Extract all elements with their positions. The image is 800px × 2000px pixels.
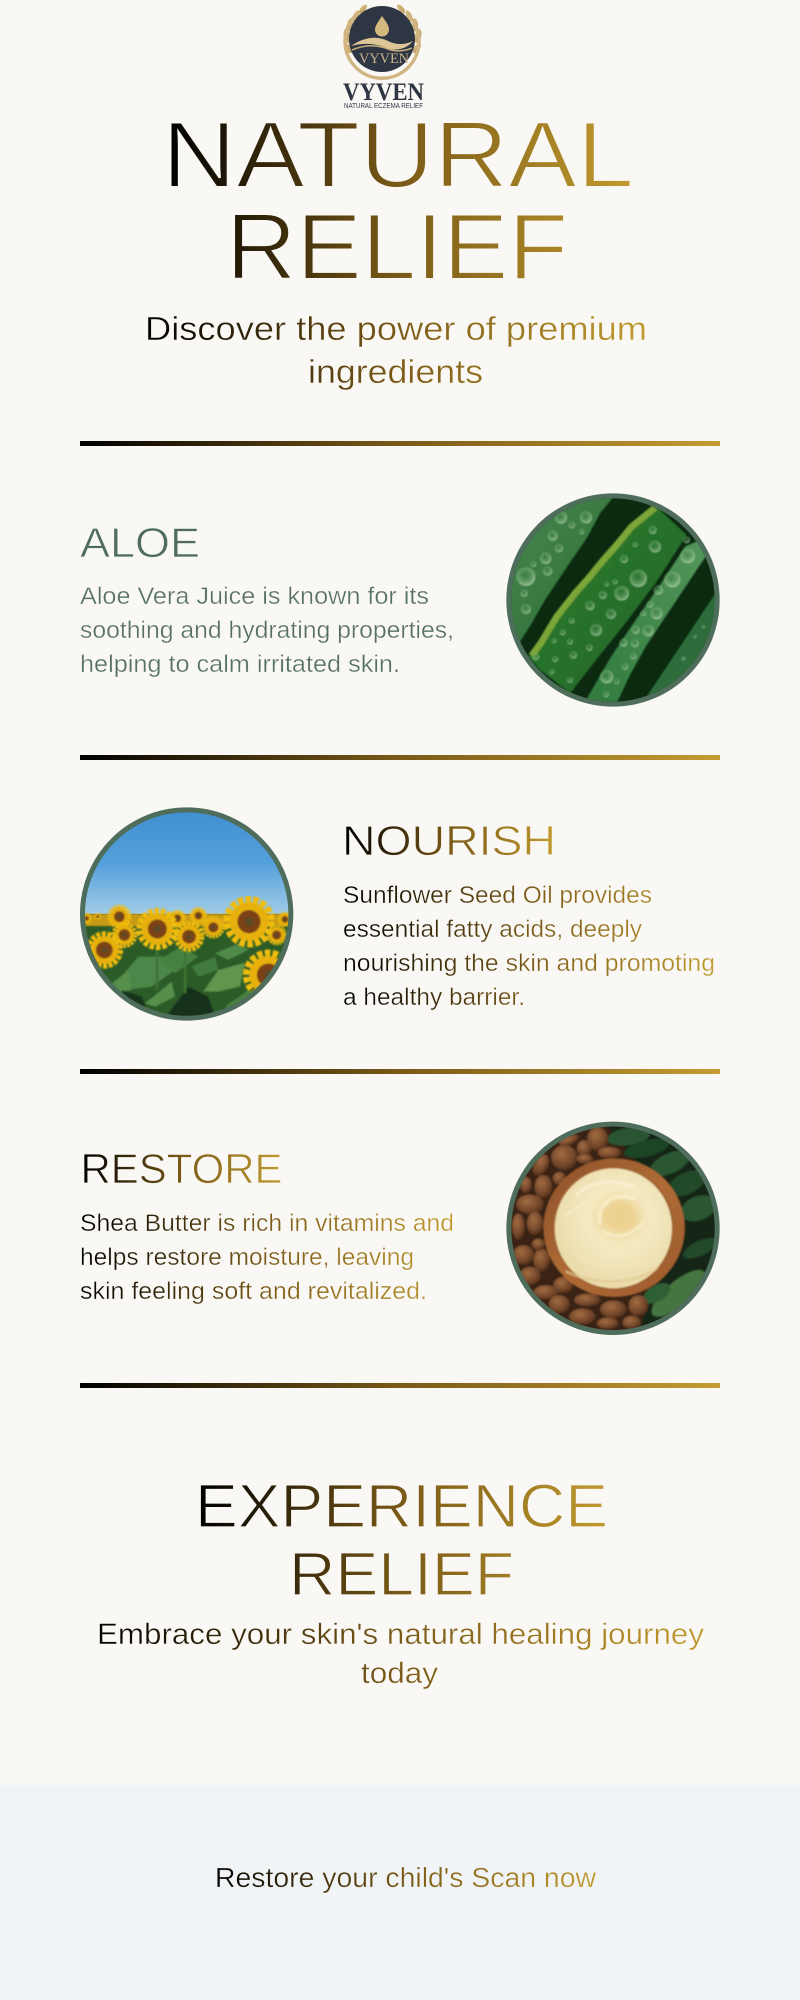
subtitle: Discover the power of premium: [145, 310, 647, 347]
subtitle: [145, 310, 647, 390]
text: nourish description: Sunflower Seed Oil provides: [343, 882, 652, 909]
text: closing line: today: [361, 1657, 438, 1690]
icon: aloe photo: [506, 493, 720, 707]
logo medallion name: VYVEN: [359, 51, 409, 67]
logo tagline: NATURAL ECZEMA RELIEF: [344, 103, 423, 110]
text: closing line: Embrace your skin's natural healing journey: [97, 1618, 704, 1651]
text: call to action: Restore your child's Scan now: [215, 1862, 597, 1893]
text: nourish description: essential fatty acids, deeply: [343, 916, 642, 943]
text: restore description: skin feeling soft and revitalized.: [80, 1278, 427, 1305]
panel: nourish: [75, 800, 715, 1027]
subtitle: ingredients: [308, 353, 483, 390]
text: aloe description: Aloe Vera Juice is known for its: [80, 583, 429, 610]
divider: [80, 1069, 720, 1074]
panel: footer band: [0, 1785, 800, 2000]
heading: ALOE: ALOE: [80, 519, 200, 566]
divider: [80, 1383, 720, 1388]
text: aloe description: soothing and hydrating properties,: [80, 617, 454, 644]
heading: Experience Relief: EXPERIENCE: [195, 1472, 608, 1540]
text: closing line: [97, 1618, 704, 1690]
text: aloe description: [80, 583, 454, 678]
heading: RESTORE: RESTORE: [80, 1145, 282, 1192]
icon: shea butter photo: [506, 1122, 720, 1335]
icon: laurel leaves: [342, 3, 423, 55]
icon: gold ring: [345, 14, 419, 78]
text: nourish description: [343, 882, 715, 1011]
heading: Experience Relief: [195, 1472, 608, 1608]
text: nourish description: nourishing the skin and promoting: [343, 950, 715, 977]
icon: sunflower photo: [80, 807, 294, 1021]
text: restore description: helps restore moisture, leaving: [80, 1244, 414, 1271]
divider: [80, 755, 720, 760]
title: Natural Relief: NATURAL: [162, 102, 634, 207]
text: restore description: [80, 1210, 454, 1305]
panel: restore: [80, 1115, 727, 1342]
icon: oil drop: [375, 16, 389, 36]
text: nourish description: a healthy barrier.: [343, 984, 525, 1011]
text: aloe description: helping to calm irritated skin.: [80, 651, 400, 678]
icon: dark medallion: [349, 6, 415, 72]
text: restore description: Shea Butter is rich in vitamins and: [80, 1210, 454, 1237]
heading: NOURISH: NOURISH: [342, 817, 556, 864]
icon: waves: [351, 38, 413, 49]
title: Natural Relief: RELIEF: [226, 194, 568, 299]
divider: [80, 441, 720, 446]
logo: VYVEN: [342, 3, 424, 110]
title: Natural Relief: [162, 102, 634, 299]
panel: aloe: [80, 485, 727, 712]
heading: Experience Relief: RELIEF: [289, 1540, 514, 1608]
logo wordmark: VYVEN: [343, 79, 424, 106]
